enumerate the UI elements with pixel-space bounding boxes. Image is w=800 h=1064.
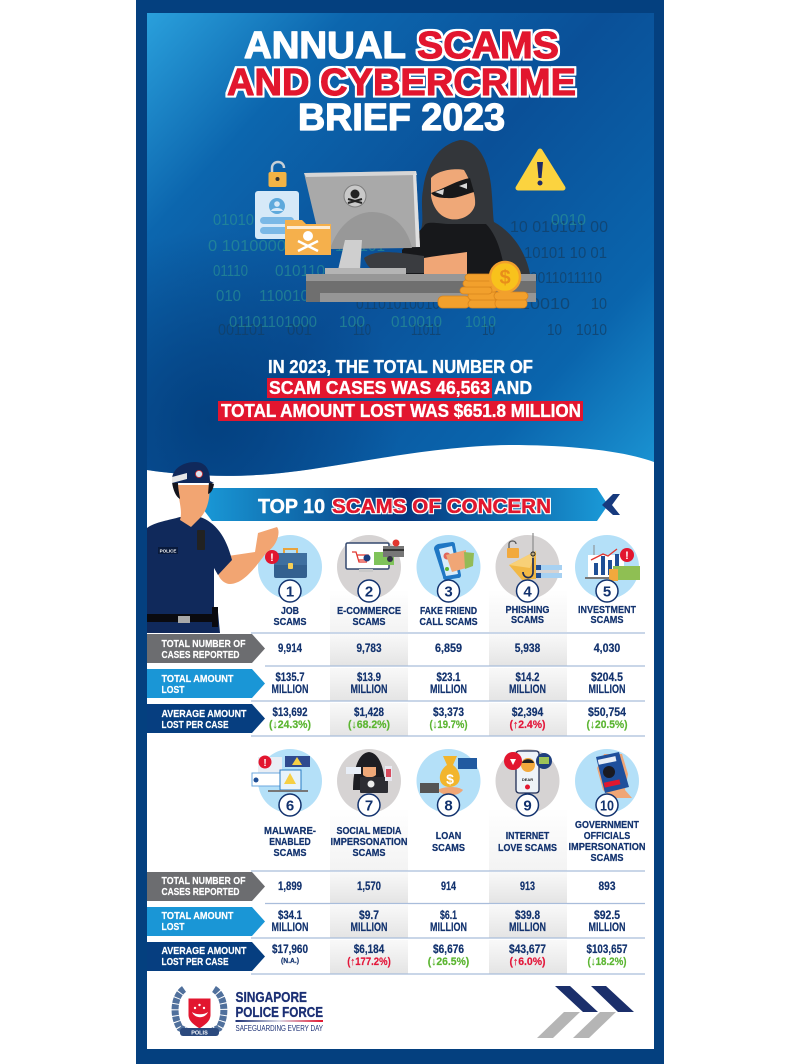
officer body camera bbox=[197, 530, 205, 550]
scam labels row one: PHISHING bbox=[506, 604, 550, 616]
scam labels row one: SCAMS bbox=[511, 614, 544, 626]
stats callout: SCAM CASES WAS 46,563 bbox=[269, 378, 490, 398]
scam labels row two: SOCIAL MEDIA bbox=[336, 825, 402, 837]
table lines two bbox=[251, 871, 645, 974]
icon: malware windows: ! bbox=[263, 758, 267, 769]
table values two: (↑177.2%) bbox=[347, 956, 391, 968]
scam labels row one: SCAMS bbox=[590, 614, 624, 626]
table values one: $23.1 bbox=[436, 672, 461, 684]
stats callout: TOTAL AMOUNT LOST WAS $651.8 MILLION bbox=[221, 401, 581, 421]
table values two: $34.1 bbox=[278, 910, 303, 922]
scam labels row two: IMPERSONATION bbox=[568, 841, 646, 853]
table values two: 1,899 bbox=[278, 881, 302, 893]
number badges row one: 4 bbox=[523, 584, 532, 600]
binary code background: 01101101000 bbox=[229, 314, 317, 331]
icon: warning triangle bbox=[518, 151, 563, 188]
title: BRIEF 2023 bbox=[298, 97, 505, 139]
binary code background: 1010 bbox=[465, 314, 496, 331]
panel: white content bbox=[147, 13, 654, 1049]
banner: top 10 scams heading: TOP 10 bbox=[258, 496, 325, 518]
icon: investment chart and money: ! bbox=[625, 550, 629, 562]
scam labels row two: SCAMS bbox=[352, 847, 386, 859]
binary code background: 01101010010 bbox=[356, 296, 440, 313]
table values one: $13,692 bbox=[272, 707, 308, 719]
label: average amount: AVERAGE AMOUNT bbox=[162, 945, 247, 957]
officer neck and face bbox=[178, 485, 210, 527]
number badges row one: 1 bbox=[286, 584, 294, 600]
number badges row two bbox=[279, 794, 618, 816]
number badges row one bbox=[279, 580, 618, 602]
number badges row two: 8 bbox=[444, 798, 453, 814]
scam labels row two: SCAMS bbox=[274, 847, 306, 859]
binary code background: 001 bbox=[287, 322, 312, 339]
table values one: $3,373 bbox=[433, 707, 464, 719]
table values one: MILLION bbox=[350, 684, 388, 696]
label: average amount: AVERAGE AMOUNT bbox=[162, 708, 247, 720]
binary code background: 100 bbox=[339, 314, 365, 331]
table values two: $6,184 bbox=[354, 944, 385, 956]
binary code background: 001101 bbox=[218, 322, 265, 339]
table values two: MILLION bbox=[588, 922, 626, 934]
binary code background: 0011011110 bbox=[530, 270, 602, 287]
binary code background bbox=[208, 212, 608, 339]
icon: gold coins: $ bbox=[499, 267, 511, 289]
table values two: MILLION bbox=[350, 922, 388, 934]
title bbox=[227, 25, 576, 139]
officer name tag bbox=[158, 547, 178, 554]
binary code background: 10 bbox=[591, 296, 607, 313]
title: SCAMS bbox=[417, 25, 559, 67]
binary code background: 0 1010000 bbox=[208, 238, 286, 255]
chevron decoration bbox=[537, 986, 634, 1038]
binary code background: 010110 bbox=[275, 263, 325, 280]
number badges row one: 5 bbox=[603, 584, 611, 600]
icon: phishing hook and envelope bbox=[507, 533, 562, 580]
table values one: (↑2.4%) bbox=[510, 719, 546, 731]
table values two: $6,676 bbox=[433, 944, 464, 956]
outer frame bbox=[136, 0, 664, 1064]
scam labels row one: SCAMS bbox=[274, 616, 306, 628]
icon: loan money bag bbox=[420, 756, 477, 795]
table values two: (↑6.0%) bbox=[510, 956, 546, 968]
binary code background: 10101 10 01 bbox=[524, 245, 607, 262]
table values one: 9,783 bbox=[356, 643, 382, 655]
label: total cases bbox=[147, 872, 265, 901]
binary code background: 010010 bbox=[391, 314, 442, 331]
stats callout: IN 2023, THE TOTAL NUMBER OF bbox=[268, 357, 533, 377]
label: total amount: LOST bbox=[162, 684, 185, 696]
table values one: MILLION bbox=[430, 684, 467, 696]
table values two: (↓26.5%) bbox=[428, 956, 470, 968]
police force emblem: POLIS bbox=[191, 1030, 208, 1036]
label: total cases: CASES REPORTED bbox=[162, 886, 240, 898]
label: total cases: TOTAL NUMBER OF bbox=[162, 875, 246, 887]
table values two: $103,657 bbox=[586, 944, 628, 956]
icon: investment chart and money bbox=[585, 545, 640, 581]
table values one: (↓20.5%) bbox=[586, 719, 628, 731]
binary code background: 1010 bbox=[576, 322, 607, 339]
panel: blue hero background bbox=[147, 13, 654, 483]
table values two: 913 bbox=[520, 881, 535, 893]
title: AND CYBERCRIME bbox=[227, 62, 576, 104]
icon: monitor bbox=[304, 171, 420, 274]
table values two: $6.1 bbox=[440, 910, 457, 922]
stats callout bbox=[218, 357, 583, 421]
table values one: MILLION bbox=[272, 684, 308, 696]
table values one: (↓24.3%) bbox=[269, 719, 311, 731]
table values one: 6,859 bbox=[435, 643, 462, 655]
table values one: (↓68.2%) bbox=[348, 719, 390, 731]
table values one: $14.2 bbox=[516, 672, 540, 684]
table values one: $1,428 bbox=[354, 707, 385, 719]
table values two: MILLION bbox=[509, 922, 546, 934]
scam labels row two: ENABLED bbox=[269, 836, 311, 848]
title: ANNUAL bbox=[244, 25, 406, 67]
officer cap bbox=[172, 462, 214, 483]
scam labels row two: MALWARE- bbox=[264, 825, 316, 837]
icon: malware windows bbox=[252, 756, 310, 792]
table values one: $204.5 bbox=[591, 672, 624, 684]
label: total amount bbox=[147, 669, 265, 698]
label: average amount bbox=[147, 942, 265, 971]
scam labels row two: SCAMS bbox=[590, 852, 624, 864]
table values one: $135.7 bbox=[276, 672, 304, 684]
icon: job scams briefcase: ! bbox=[270, 552, 274, 564]
scam labels row two bbox=[264, 819, 646, 864]
officer hair bbox=[172, 482, 214, 499]
officer name tag: POLICE bbox=[160, 548, 176, 554]
binary code background: 010 bbox=[216, 288, 241, 305]
table values two: $92.5 bbox=[594, 910, 621, 922]
scam labels row one: E-COMMERCE bbox=[337, 605, 401, 617]
table values two: $39.8 bbox=[515, 910, 541, 922]
binary code background: 01110 bbox=[213, 263, 248, 280]
label: total amount: LOST bbox=[162, 921, 185, 933]
table values one: MILLION bbox=[588, 684, 626, 696]
label: total amount: TOTAL AMOUNT bbox=[162, 910, 234, 922]
table values two: MILLION bbox=[272, 922, 308, 934]
icon: internet love phone: DEAR bbox=[522, 777, 533, 782]
table values two: $9.7 bbox=[359, 910, 379, 922]
number badges row one: 2 bbox=[365, 584, 373, 600]
icon: login card bbox=[255, 191, 299, 239]
icon: gold coins bbox=[438, 262, 528, 308]
table values two: 914 bbox=[441, 881, 456, 893]
label: total amount bbox=[147, 907, 265, 936]
table values one: $2,394 bbox=[512, 707, 544, 719]
column shading bbox=[330, 590, 567, 974]
binary code background: 01010 bbox=[213, 212, 254, 229]
banner: top 10 scams heading bbox=[200, 488, 620, 521]
table values two: (↓18.2%) bbox=[588, 956, 627, 968]
icon: hacker at computer bbox=[304, 140, 536, 308]
icon: job scams briefcase bbox=[265, 549, 307, 578]
icon: e-commerce monitor bbox=[346, 540, 404, 572]
icon: social media hacker bbox=[346, 752, 392, 793]
number badges row two: 9 bbox=[523, 798, 532, 814]
table values two: (N.A.) bbox=[281, 956, 299, 965]
stats callout: AND bbox=[494, 378, 532, 398]
binary code background: 110 bbox=[353, 322, 371, 339]
icon: padlock bbox=[268, 162, 286, 187]
table values one: MILLION bbox=[509, 684, 546, 696]
table values two: MILLION bbox=[430, 922, 467, 934]
label: average amount bbox=[147, 704, 265, 733]
binary code background: 110010 bbox=[259, 288, 309, 305]
table values one: (↓19.7%) bbox=[430, 719, 468, 731]
table values two: 1,570 bbox=[357, 881, 381, 893]
scam labels row one: JOB bbox=[281, 605, 299, 617]
label: total amount: TOTAL AMOUNT bbox=[162, 673, 234, 685]
scam labels row one: SCAMS bbox=[352, 616, 386, 628]
table values two bbox=[272, 881, 628, 968]
scam labels row one: FAKE FRIEND bbox=[420, 605, 477, 617]
banner: top 10 scams heading: SCAMS OF CONCERN bbox=[332, 496, 551, 518]
scam labels row one bbox=[274, 604, 637, 628]
number badges row two: 7 bbox=[365, 798, 373, 814]
binary code background: 10 bbox=[547, 322, 562, 339]
table values two: 893 bbox=[598, 881, 616, 893]
police officer bbox=[147, 462, 279, 633]
table values two: $43,677 bbox=[509, 944, 546, 956]
icon: desk bbox=[306, 274, 536, 302]
icon: fake friend call phone bbox=[434, 542, 474, 580]
scam labels row two: GOVERNMENT bbox=[575, 819, 639, 831]
table values one: 5,938 bbox=[515, 643, 541, 655]
label: total cases: TOTAL NUMBER OF bbox=[162, 638, 246, 650]
binary code background: 0010 bbox=[551, 212, 586, 229]
icon circles row two bbox=[258, 749, 639, 813]
icon: hacker bbox=[364, 140, 530, 274]
scam labels row two: LOAN bbox=[436, 830, 461, 842]
officer belt bbox=[147, 607, 218, 627]
icon: internet love phone bbox=[504, 751, 552, 793]
scam labels row two: IMPERSONATION bbox=[330, 836, 408, 848]
police force wordmark: SAFEGUARDING EVERY DAY bbox=[236, 1024, 324, 1033]
number badges row two: 6 bbox=[286, 798, 294, 814]
scam labels row two: INTERNET bbox=[506, 830, 550, 842]
table values one: 4,030 bbox=[594, 643, 620, 655]
police force wordmark: SINGAPORE bbox=[236, 990, 307, 1006]
officer arm bbox=[218, 527, 279, 584]
label: total cases: CASES REPORTED bbox=[162, 649, 240, 661]
number badges row one: 3 bbox=[444, 584, 453, 600]
binary code background: 11011 bbox=[411, 322, 441, 339]
table values one: $13.9 bbox=[357, 672, 381, 684]
scam labels row two: LOVE SCAMS bbox=[498, 842, 557, 854]
table values one: $50,754 bbox=[588, 707, 627, 719]
number badges row two: 10 bbox=[600, 798, 614, 814]
officer body bbox=[147, 517, 232, 633]
scam labels row two: SCAMS bbox=[432, 842, 465, 854]
table values one: 9,914 bbox=[278, 643, 303, 655]
row labels table two bbox=[147, 872, 265, 971]
police force wordmark bbox=[236, 990, 324, 1033]
table lines one bbox=[251, 633, 645, 736]
icon: skull folder bbox=[285, 220, 331, 255]
row labels table one bbox=[147, 634, 265, 733]
scam labels row one: CALL SCAMS bbox=[420, 616, 478, 628]
binary code background: 10010 bbox=[520, 296, 570, 313]
binary code background: 110101 bbox=[335, 238, 385, 255]
scam labels row two: OFFICIALS bbox=[584, 830, 630, 842]
label: average amount: LOST PER CASE bbox=[162, 956, 228, 968]
scam labels row one: INVESTMENT bbox=[578, 604, 637, 616]
label: total cases bbox=[147, 634, 265, 663]
table values one bbox=[269, 643, 628, 731]
binary code background: 10 bbox=[482, 322, 495, 339]
icon: loan money bag: $ bbox=[446, 771, 454, 787]
label: average amount: LOST PER CASE bbox=[162, 719, 228, 731]
binary code background: 10 010101 00 bbox=[510, 219, 608, 236]
police force emblem bbox=[175, 989, 224, 1036]
table values two: $17,960 bbox=[272, 944, 308, 956]
police force wordmark: POLICE FORCE bbox=[236, 1005, 323, 1021]
icon circles row one bbox=[258, 535, 639, 599]
icon: government impersonation card bbox=[596, 752, 632, 798]
